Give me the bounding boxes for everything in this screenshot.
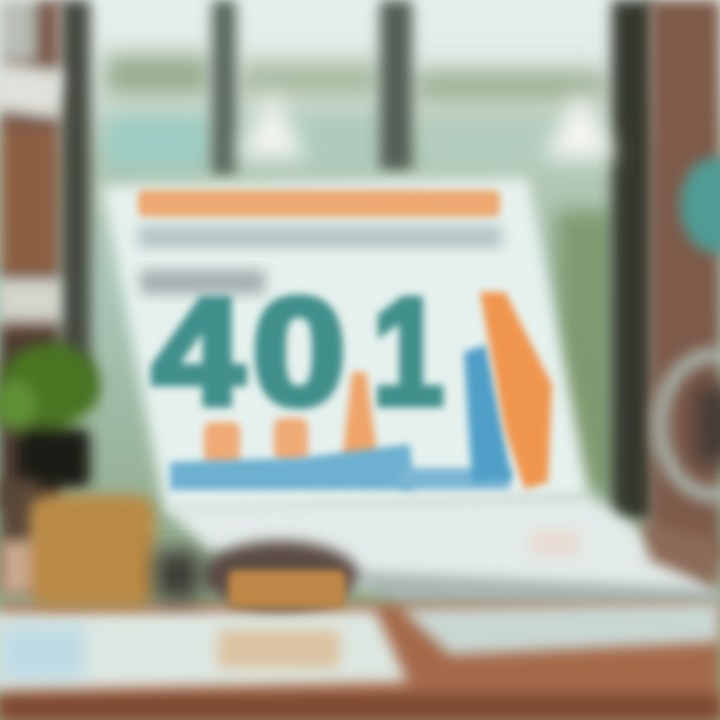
poster small heading	[140, 270, 265, 294]
big number 401: 0	[252, 267, 346, 437]
teal round ornament	[680, 157, 720, 253]
poster	[102, 178, 590, 512]
small tan jar	[228, 570, 346, 608]
right papers on table	[400, 602, 720, 655]
left dark base	[0, 480, 40, 590]
big number 401: 4	[152, 267, 244, 437]
blue vertical bar	[464, 345, 512, 482]
right wooden wall	[650, 0, 720, 560]
orange small bars	[204, 372, 378, 466]
poster title bar	[138, 190, 500, 217]
plant	[0, 343, 100, 488]
round wheel ornament	[660, 355, 720, 495]
tan label on paper	[218, 630, 340, 668]
dark object behind small jar	[202, 541, 358, 609]
poster subtitle	[138, 226, 502, 248]
table top	[0, 520, 720, 720]
hanging lamps	[238, 90, 616, 158]
window frame bars	[60, 0, 654, 520]
orange tall bar	[480, 292, 552, 490]
papers on table	[165, 495, 720, 606]
left shelf	[0, 0, 63, 510]
big number 401: 1	[372, 267, 444, 437]
cork jar	[0, 495, 155, 607]
big number 401	[152, 267, 444, 437]
bottom left paper	[0, 610, 408, 690]
blue baseline band	[170, 444, 414, 490]
